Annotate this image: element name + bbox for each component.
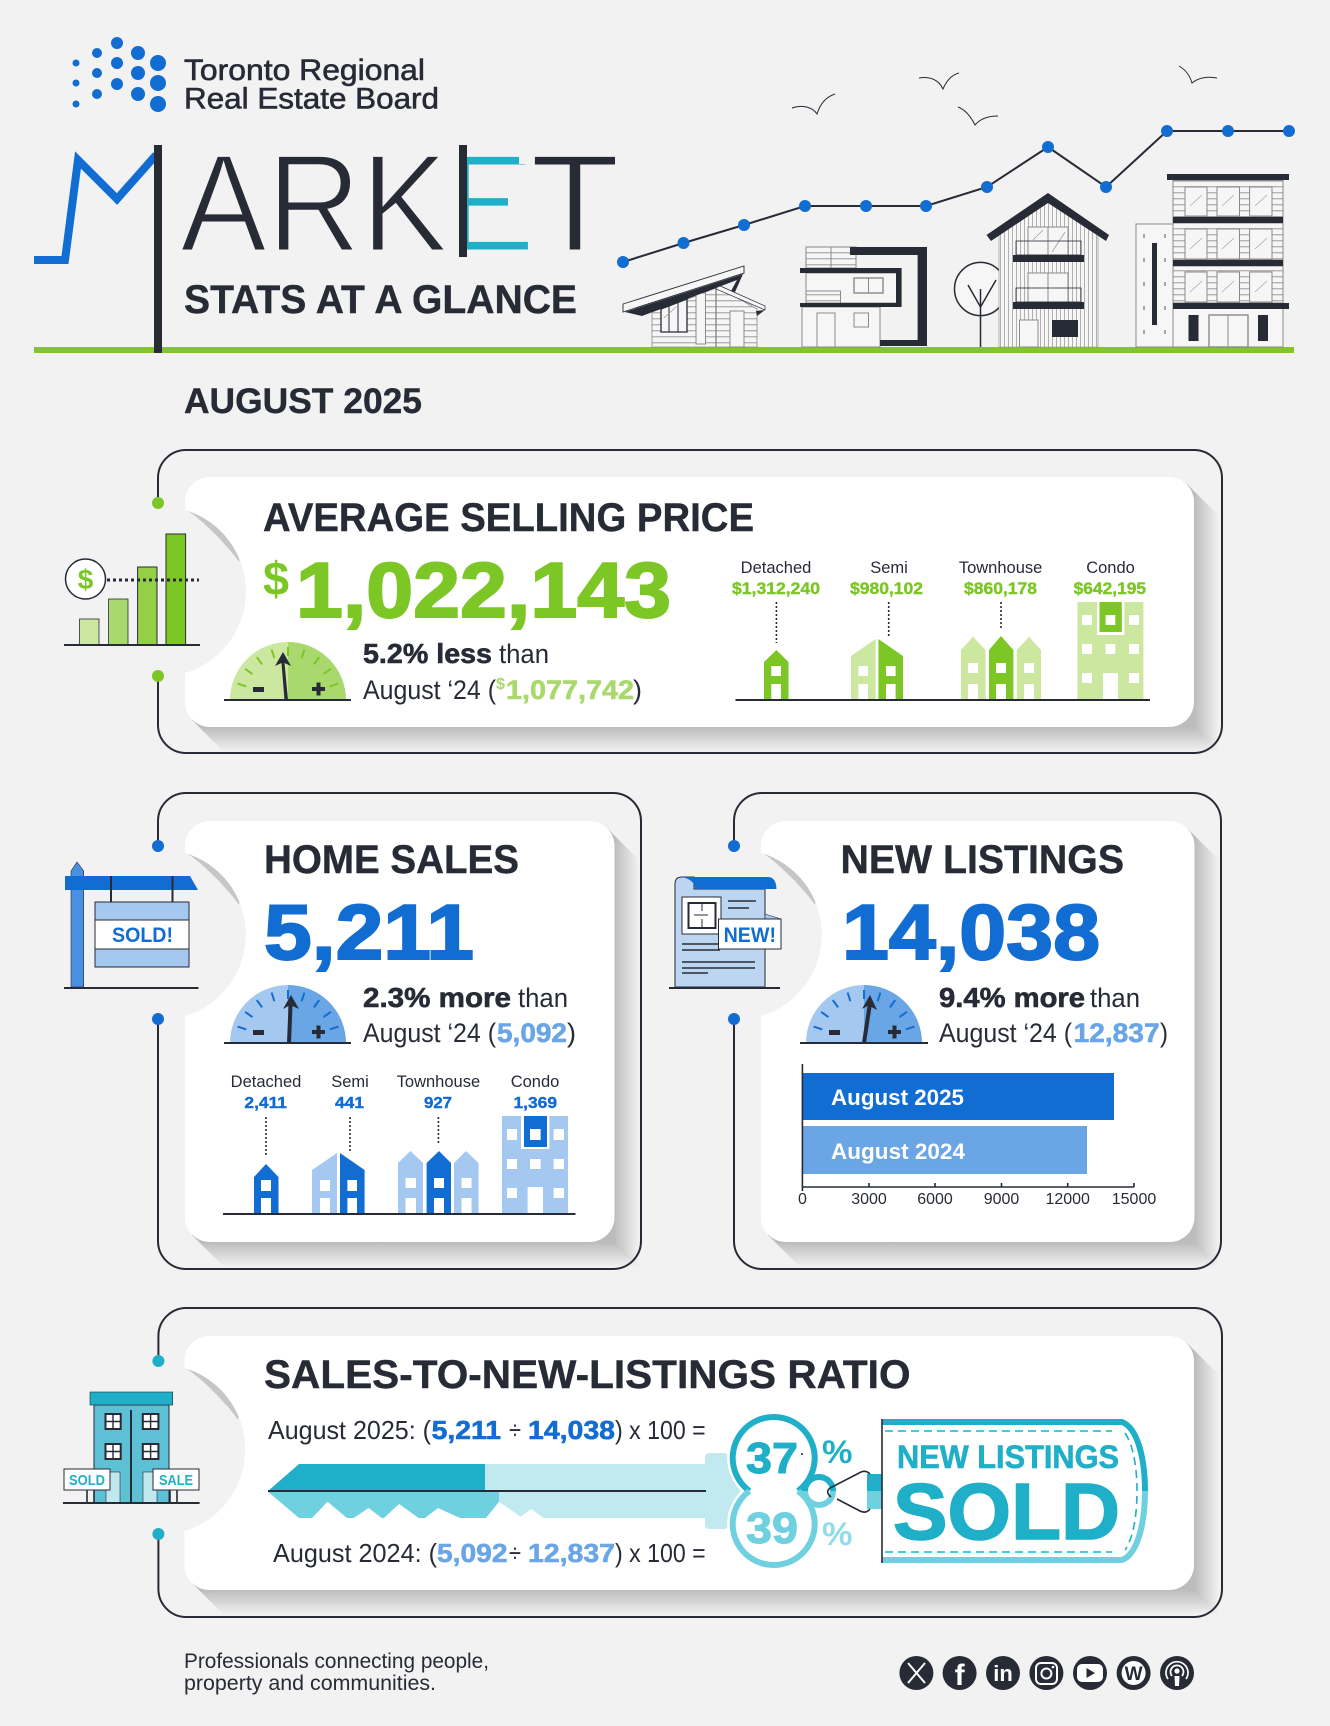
percentage rings <box>733 1417 852 1565</box>
E bar length adjustment <box>508 140 531 214</box>
values: $642,195 <box>1074 580 1146 598</box>
icon: detached house <box>254 1164 278 1214</box>
formula: August 2024: 12,837 <box>528 1538 615 1568</box>
comparison text: than <box>1090 983 1140 1013</box>
axis labels: 9000 <box>984 1191 1019 1208</box>
icon: Facebook: f <box>955 1659 966 1692</box>
icon: building with sold and sale signs <box>63 1392 200 1503</box>
values: $980,102 <box>850 580 923 598</box>
icon: LinkedIn: in <box>993 1661 1013 1686</box>
social icons <box>899 1656 1194 1692</box>
values <box>732 580 1146 598</box>
line chart over houses <box>617 125 1295 268</box>
M vertical bar <box>154 145 162 353</box>
comparison text: 2.3% more <box>363 982 511 1013</box>
card shadow <box>185 484 1219 752</box>
icon: new listing document <box>669 877 781 988</box>
logo: Toronto Regional Real Estate Board <box>72 37 439 116</box>
percentage rings: 39 <box>746 1504 798 1553</box>
comparison text: $ <box>496 676 505 693</box>
icon: condo building <box>502 1116 568 1214</box>
dotted leaders <box>776 602 1001 643</box>
comparison text: than <box>518 983 568 1013</box>
formula: August 2024: 5,092 <box>437 1538 508 1568</box>
icon: building with sold and sale signs: SALE <box>159 1472 193 1489</box>
sold tag <box>828 1419 1145 1563</box>
comparison text: 12,837 <box>1074 1018 1160 1048</box>
date heading: AUGUST 2025 <box>184 381 422 421</box>
formula: August 2024: ÷ <box>509 1538 521 1568</box>
icon: condo building <box>1077 602 1143 700</box>
panel: new listings <box>669 793 1221 1269</box>
icon: bar chart with dollar: $ <box>78 564 94 595</box>
property type chart <box>223 1073 576 1214</box>
icon: detached house <box>764 650 788 700</box>
values: 441 <box>335 1095 364 1112</box>
white card <box>185 821 614 1242</box>
icon: logo dots <box>72 37 166 112</box>
values: $860,178 <box>964 580 1037 598</box>
comparison text: August ‘24 ( <box>363 675 496 705</box>
values <box>244 1095 557 1112</box>
gauge <box>224 985 351 1043</box>
icon: semi house <box>851 639 903 700</box>
white card <box>761 821 1194 1242</box>
connector dots <box>152 1355 164 1540</box>
percentage rings: 37 <box>746 1434 798 1483</box>
bar labels: August 2024 <box>831 1139 966 1164</box>
icon: Instagram <box>1029 1656 1063 1690</box>
comparison text: 5.2% less <box>363 638 492 669</box>
percentage rings: % <box>822 1434 852 1470</box>
axis labels: 6000 <box>917 1191 953 1208</box>
logo wordmark: Real Estate Board <box>184 82 439 116</box>
panel: average selling price <box>64 450 1222 753</box>
formula: August 2025: August 2025: ( <box>268 1415 431 1445</box>
birds <box>792 66 1217 125</box>
bar: August 2024 <box>803 1126 1087 1174</box>
big number: $ <box>263 552 289 605</box>
gauge <box>800 985 928 1043</box>
big number: 1,022,143 <box>296 546 671 634</box>
card shadow <box>185 828 639 1267</box>
formula: August 2025 <box>268 1415 706 1445</box>
sold tag: SOLD <box>893 1467 1120 1556</box>
values: 927 <box>424 1095 452 1112</box>
comparison text: August ‘24 ( <box>939 1018 1072 1048</box>
heading: NEW LISTINGS <box>840 838 1124 882</box>
house: modern box <box>800 247 927 347</box>
icon: bar chart with dollar <box>64 534 200 645</box>
axis labels: 12000 <box>1045 1191 1090 1208</box>
big number: 14,038 <box>842 888 1100 976</box>
labels: Condo <box>511 1073 559 1091</box>
labels <box>741 559 1135 577</box>
panel: sales-to-new-listings ratio <box>63 1308 1222 1617</box>
icon: Facebook <box>943 1656 977 1692</box>
panel: home sales <box>64 793 641 1269</box>
panel outline <box>158 1308 1222 1617</box>
comparison text <box>363 638 642 705</box>
E stem bar <box>459 145 467 257</box>
property type chart <box>732 559 1150 700</box>
letter M as blue line chart <box>34 155 156 260</box>
key graphic <box>268 1453 742 1529</box>
labels: Semi <box>870 559 908 577</box>
big number: 5,211 <box>264 888 474 976</box>
icon: building with sold and sale signs: SOLD <box>69 1472 105 1489</box>
comparison text: 1,077,742 <box>506 675 634 705</box>
comparison text <box>363 982 576 1048</box>
icon: YouTube <box>1073 1656 1107 1690</box>
footer tagline: property and communities. <box>184 1672 436 1695</box>
footer tagline: Professionals connecting people, <box>184 1650 489 1673</box>
labels: Detached <box>231 1073 301 1091</box>
heading: SALES-TO-NEW-LISTINGS RATIO <box>264 1353 910 1397</box>
values: 1,369 <box>514 1095 557 1112</box>
subtitle: STATS AT A GLANCE <box>184 278 577 322</box>
formula: August 2024 <box>273 1538 706 1568</box>
bar: August 2025 <box>803 1073 1114 1120</box>
connector dots <box>728 840 740 1025</box>
bar labels: August 2025 <box>831 1085 964 1110</box>
house: sloped roof <box>623 266 765 347</box>
icon: townhouses <box>961 636 1041 700</box>
logo wordmark <box>184 54 439 116</box>
formula: August 2025: ) x 100 = <box>615 1415 706 1445</box>
comparison text: 5,092 <box>497 1018 567 1048</box>
connector dots <box>152 497 164 682</box>
labels: Condo <box>1086 559 1135 577</box>
footer tagline <box>184 1650 489 1695</box>
icon: WordPress <box>1117 1656 1151 1690</box>
icon: sold sign <box>64 862 198 988</box>
tree <box>954 262 1006 347</box>
letter E: E <box>447 126 535 281</box>
formula: August 2024: August 2024: ( <box>273 1538 437 1568</box>
white card <box>185 477 1194 727</box>
labels <box>231 1073 559 1091</box>
ground line <box>34 347 1294 353</box>
comparison text: than <box>499 639 549 669</box>
icon: semi house <box>312 1153 365 1214</box>
dotted leaders <box>266 1117 438 1157</box>
formula: August 2025: 5,211 <box>432 1415 501 1445</box>
labels: Semi <box>331 1073 369 1091</box>
panel outline <box>158 793 641 1269</box>
axis labels: 3000 <box>851 1191 887 1208</box>
comparison text: August ‘24 ( <box>363 1018 496 1048</box>
formula: August 2025: ÷ <box>509 1415 521 1445</box>
icon: LinkedIn <box>986 1656 1020 1690</box>
panel outline <box>734 793 1221 1269</box>
letters ARK: ARK <box>180 126 448 281</box>
formula: August 2025: 14,038 <box>528 1415 615 1445</box>
sold tag: NEW LISTINGS <box>897 1439 1119 1475</box>
labels: Detached <box>741 559 811 577</box>
icon: new listing document: NEW! <box>724 924 776 947</box>
axis labels: 0 <box>798 1191 807 1208</box>
house: gabled <box>986 193 1109 347</box>
comparison text: 9.4% more <box>939 982 1085 1013</box>
bar chart: new listings by year <box>798 1064 1156 1208</box>
heading: AVERAGE SELLING PRICE <box>263 496 754 540</box>
comparison text: ) <box>633 675 642 705</box>
axis labels <box>798 1191 1156 1208</box>
axes <box>802 1064 1134 1191</box>
panel outline <box>158 450 1222 753</box>
axis labels: 15000 <box>1112 1191 1156 1208</box>
logo wordmark: Toronto Regional <box>184 54 425 87</box>
comparison text <box>939 982 1168 1048</box>
card shadow <box>184 1343 1219 1615</box>
heading: HOME SALES <box>264 838 519 882</box>
values: 2,411 <box>244 1095 287 1112</box>
icon: podcast <box>1160 1656 1194 1690</box>
gauge <box>224 642 351 700</box>
icon: WordPress: W <box>1125 1664 1143 1685</box>
percentage rings: % <box>822 1516 852 1552</box>
labels: Townhouse <box>397 1073 480 1091</box>
white card <box>184 1336 1194 1590</box>
bar labels <box>831 1085 966 1164</box>
formula: August 2024: ) x 100 = <box>615 1538 706 1568</box>
comparison text: ) <box>1160 1018 1168 1048</box>
card shadow <box>761 828 1219 1267</box>
comparison text: ) <box>567 1018 576 1048</box>
letter T: T <box>530 126 620 281</box>
connector dots <box>152 840 164 1025</box>
labels: Townhouse <box>959 559 1042 577</box>
icon: X <box>899 1656 933 1690</box>
building: apartment <box>1136 174 1289 347</box>
values: $1,312,240 <box>732 580 820 598</box>
icon: sold sign: SOLD! <box>112 924 173 947</box>
title: MARKET <box>34 126 620 281</box>
icon: townhouses <box>398 1151 479 1214</box>
